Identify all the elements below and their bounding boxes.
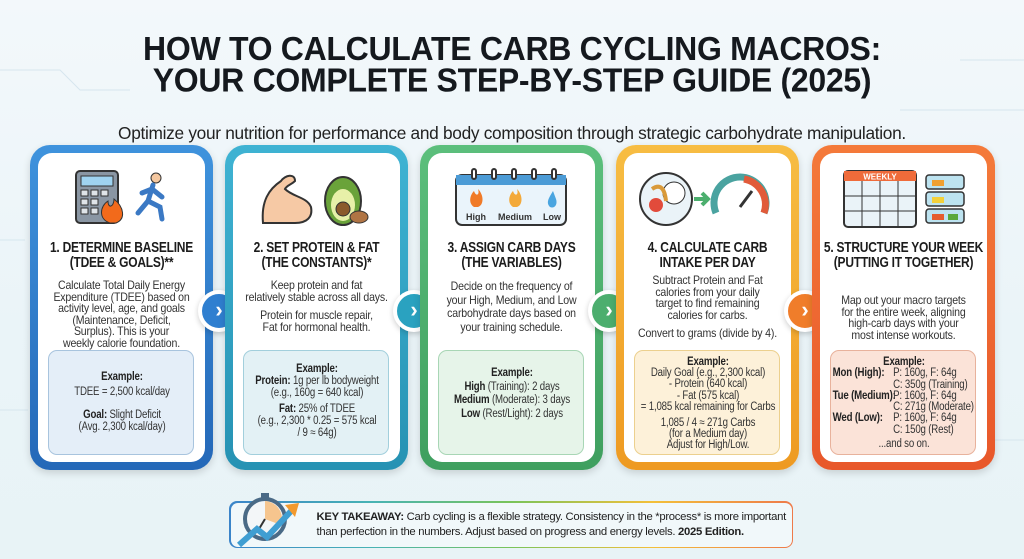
title xyxy=(143,29,881,99)
text xyxy=(841,293,966,342)
text: for the entire week, aligning xyxy=(841,304,966,318)
heading xyxy=(254,239,380,271)
heading xyxy=(648,239,767,271)
heading xyxy=(448,239,576,271)
heading: (THE VARIABLES) xyxy=(461,254,562,271)
example box: (e.g., 2,300 * 0.25 = 575 kcal xyxy=(258,415,376,427)
text: takeaway xyxy=(316,510,786,538)
example box: Tue (Medium): xyxy=(833,390,896,402)
example box: C: 271g (Moderate) xyxy=(893,401,974,413)
text: Keep protein and fat xyxy=(271,278,362,292)
title: HOW TO CALCULATE CARB CYCLING MACROS: xyxy=(143,29,881,67)
panel: step 5 xyxy=(812,145,995,470)
heading: (PUTTING IT TOGETHER) xyxy=(834,254,973,271)
heading: 1. DETERMINE BASELINE xyxy=(50,239,193,256)
example box: C: 150g (Rest) xyxy=(893,424,954,436)
icon: calendar high medium low: High xyxy=(466,212,486,222)
arrow 4: › xyxy=(801,297,809,322)
text xyxy=(53,278,190,350)
example box: Goal: Slight Deficit xyxy=(83,409,161,421)
icon: food plate and gauge xyxy=(639,172,770,226)
heading xyxy=(824,239,984,271)
text: target to find remaining xyxy=(656,296,759,310)
text xyxy=(245,278,388,334)
text: Fat for hormonal health. xyxy=(263,320,370,334)
icon: weekly planner and meal prep xyxy=(843,170,965,228)
example box: Example: xyxy=(296,363,338,375)
text: Map out your macro targets xyxy=(841,293,966,307)
title: YOUR COMPLETE STEP-BY-STEP GUIDE (2025) xyxy=(153,61,871,99)
example box: = 1,085 kcal remaining for Carbs 1,085 / 4 ≈ 271g Carbs xyxy=(641,401,775,429)
text: (Maintenance, Deficit, xyxy=(72,312,171,326)
example box xyxy=(243,350,389,455)
example box: (Avg. 2,300 kcal/day) xyxy=(78,421,166,433)
arrow 3 xyxy=(588,290,630,332)
heading xyxy=(50,239,193,271)
example box: Wed (Low): xyxy=(833,412,883,424)
example box xyxy=(438,350,584,455)
example box: P: 160g, F: 64g xyxy=(893,390,957,402)
heading: (TDEE & GOALS)** xyxy=(70,254,173,271)
example box: Medium (Moderate): 3 days xyxy=(454,394,570,406)
arrow 1 xyxy=(198,290,240,332)
text xyxy=(446,279,577,334)
heading: 5. STRUCTURE YOUR WEEK xyxy=(824,239,983,256)
arrow 2: › xyxy=(410,297,418,322)
text: takeaway: than perfection in the numbers. Adjust based on progress and energy levels. 2025 Edition. xyxy=(316,526,744,538)
example box: - Protein (640 kcal) xyxy=(669,378,747,390)
example box: Example: xyxy=(101,371,143,383)
example box: Adjust for High/Low. xyxy=(667,439,749,451)
example box: P: 160g, F: 64g xyxy=(893,412,957,424)
icon: weekly planner and meal prep: WEEKLY xyxy=(863,172,897,182)
example box: Example: xyxy=(687,356,729,368)
text: Expenditure (TDEE) based on xyxy=(53,290,190,304)
text: Calculate Total Daily Energy xyxy=(58,278,185,292)
example box xyxy=(634,350,780,455)
text: weekly calorie foundation. xyxy=(63,336,180,350)
icon: arm and avocado xyxy=(262,174,368,226)
icon: calendar high medium low: Medium xyxy=(498,212,532,222)
example box xyxy=(48,350,194,455)
example box: P: 160g, F: 64g xyxy=(893,367,957,379)
icon: calendar high medium low xyxy=(455,168,567,226)
text: Subtract Protein and Fat xyxy=(652,273,763,287)
example box: TDEE = 2,500 kcal/day xyxy=(74,386,170,398)
text: calories from your daily xyxy=(655,284,760,298)
example box: / 9 ≈ 64g) xyxy=(297,427,337,439)
example box: (e.g., 160g = 640 kcal) Fat: 25% of TDEE xyxy=(271,387,363,415)
example box: Daily Goal (e.g., 2,300 kcal) xyxy=(651,367,765,379)
text xyxy=(638,273,777,340)
text: calories for carbs. Convert to grams (divide by 4). xyxy=(638,308,777,340)
example box: Example: xyxy=(883,356,925,368)
text: takeaway: KEY TAKEAWAY: Carb cycling is a flexible strategy. Consistency in the *process* is more important xyxy=(316,510,786,522)
icon: calendar high medium low: Low xyxy=(543,212,562,222)
example box: ...and so on. xyxy=(878,438,929,450)
icon: calculator and runner xyxy=(75,170,164,224)
callout: key takeaway xyxy=(229,501,793,548)
heading: (THE CONSTANTS)* xyxy=(262,254,371,271)
text: most intense workouts. xyxy=(851,328,956,342)
example box: Protein: 1g per lb bodyweight xyxy=(255,375,379,387)
panel: step 4 xyxy=(616,145,799,470)
arrow 4 xyxy=(784,290,826,332)
text: activity level, age, and goals xyxy=(58,301,185,315)
panel: step 2 xyxy=(225,145,408,470)
arrow 2 xyxy=(393,290,435,332)
panel: step 3 xyxy=(420,145,603,470)
example box: - Fat (575 kcal) xyxy=(677,390,739,402)
panel: step 1 xyxy=(30,145,213,470)
example box: Mon (High): xyxy=(833,367,884,379)
example box: (for a Medium day) xyxy=(669,428,747,440)
example box: Low (Rest/Light): 2 days xyxy=(461,408,563,420)
arrow 3: › xyxy=(605,297,613,322)
text: Surplus). This is your xyxy=(74,324,169,338)
text: relatively stable across all days. Protein for muscle repair, xyxy=(245,290,388,322)
icon: stopwatch with arrow xyxy=(237,493,299,547)
text: carbohydrate days based on xyxy=(447,306,576,320)
heading: 2. SET PROTEIN & FAT xyxy=(254,239,379,256)
text: high-carb days with your xyxy=(848,316,959,330)
heading: 4. CALCULATE CARB xyxy=(648,239,767,256)
heading: INTAKE PER DAY xyxy=(660,254,756,271)
example box: High (Training): 2 days xyxy=(464,380,560,392)
example box: Example: xyxy=(491,367,533,379)
example box: C: 350g (Training) xyxy=(893,379,968,391)
example box xyxy=(830,350,976,455)
subtitle: Optimize your nutrition for performance and body composition through strategic carbohydrate manipulation. xyxy=(118,123,906,143)
text: Decide on the frequency of xyxy=(451,279,572,293)
text: your training schedule. xyxy=(460,320,563,334)
arrow 1: › xyxy=(215,297,223,322)
text: your High, Medium, and Low xyxy=(447,292,576,306)
heading: 3. ASSIGN CARB DAYS xyxy=(448,239,575,256)
